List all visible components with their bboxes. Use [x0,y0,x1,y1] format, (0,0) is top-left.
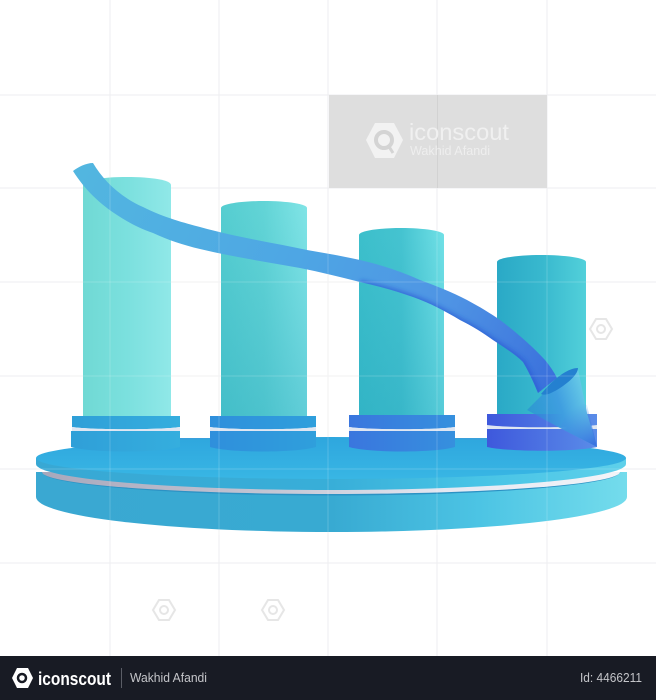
collar 4 [487,414,597,451]
arrow head [527,369,597,447]
watermark panel [329,95,547,188]
platform top plate [36,458,626,490]
watermark author: Wakhid Afandi [410,144,490,158]
collar 2 [210,416,316,452]
overlay grid lines [36,160,626,535]
footer id: Id: 4466211 [580,671,642,685]
footer logo [12,668,33,688]
footer divider [120,668,122,688]
arrow shaft shading [360,283,538,394]
platform stripe [42,472,620,494]
arrow head fin [541,368,578,395]
bar 4 [487,255,597,451]
watermark logo [366,123,403,158]
platform [36,437,627,532]
footer bar [0,656,656,700]
footer brand: iconscout [38,669,111,689]
bar 3 [349,228,455,452]
collar 3 [349,415,455,452]
small watermark icons [153,319,612,620]
trend arrow [73,163,597,447]
footer author: Wakhid Afandi [130,671,207,685]
platform lower plate [36,472,627,532]
bar 2 [210,201,316,452]
bar 1 [71,177,180,452]
watermark name: iconscout [409,119,510,145]
platform stripe shadow [42,472,620,496]
arrow shaft [73,163,557,393]
collar 1 [71,416,180,452]
connector behind collars [180,438,487,450]
